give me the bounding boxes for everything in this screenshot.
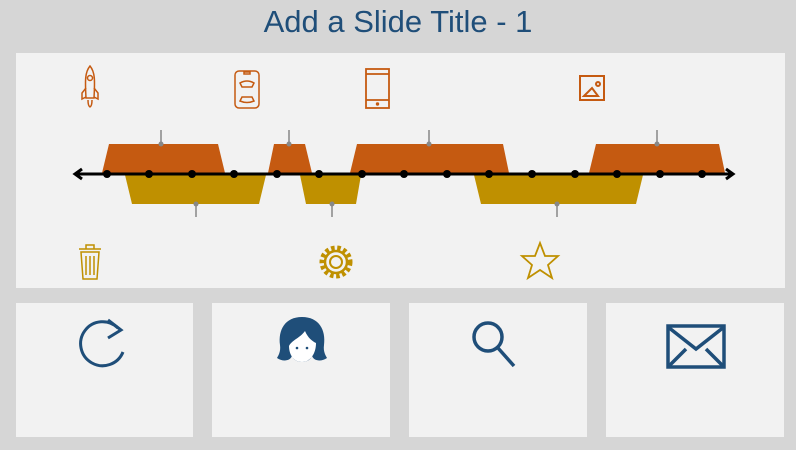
panel: search bbox=[409, 303, 587, 437]
icon: gear bbox=[322, 248, 350, 276]
icon: picture bbox=[580, 76, 604, 100]
icon: refresh bbox=[81, 320, 123, 366]
panel: refresh bbox=[16, 303, 193, 437]
icon: phone bbox=[366, 69, 389, 108]
icon: mail bbox=[668, 326, 724, 367]
icon: search bbox=[474, 323, 514, 366]
timeline chart bbox=[75, 130, 733, 217]
icon: trash bbox=[79, 245, 101, 279]
icon: person bbox=[277, 317, 327, 362]
title: Add a Slide Title - 1 bbox=[264, 4, 532, 39]
panel: timeline bbox=[16, 53, 785, 288]
icon: car bbox=[235, 71, 259, 108]
panel: person bbox=[212, 303, 390, 437]
icon: rocket bbox=[82, 66, 98, 107]
icon: star bbox=[522, 243, 558, 278]
panel: mail bbox=[606, 303, 784, 437]
